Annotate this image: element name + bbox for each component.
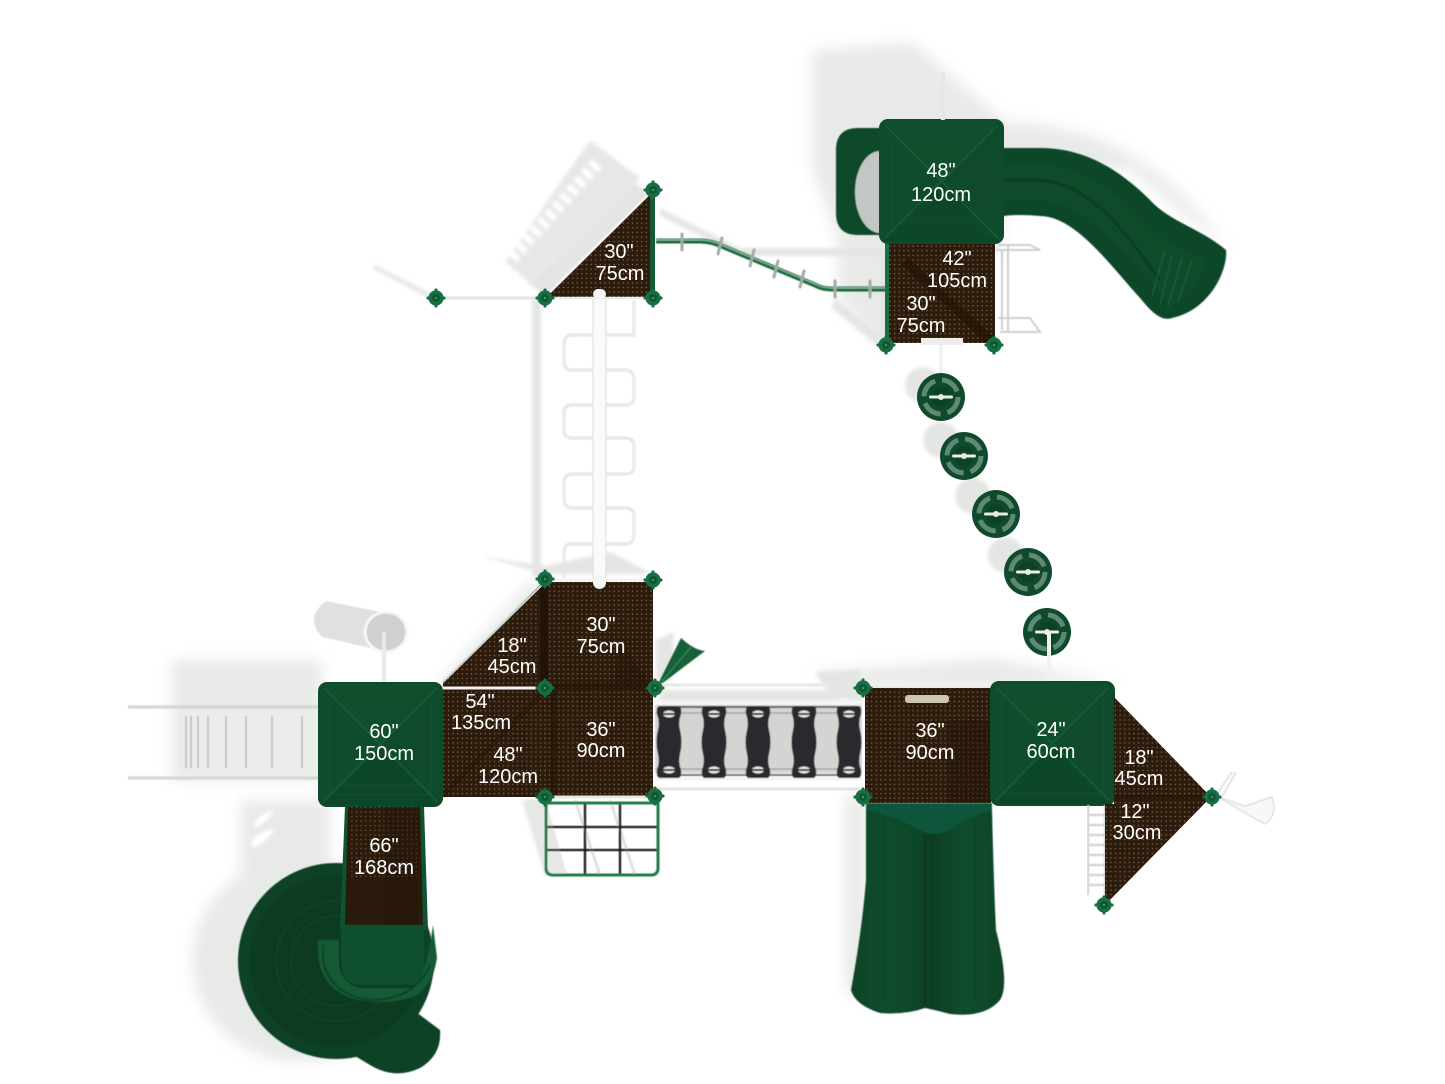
monkey-bar ladder with white centre pole: [564, 289, 634, 589]
label: upper deck 30 inch: 75cm: [897, 315, 945, 337]
wide double slide: [851, 803, 1004, 1015]
label: 36 inch: 90cm: [906, 742, 954, 764]
crawl tube: [314, 601, 407, 682]
upper right curved slide: [1003, 148, 1226, 319]
label: 54 inch: 135cm: [451, 712, 511, 734]
side ladder upper tower: [996, 245, 1040, 332]
stair shadow on upper deck side: [505, 140, 640, 283]
label: 12 inch: [1113, 801, 1161, 844]
roof: 24 inch tower: [990, 681, 1115, 806]
upper tower back wall and dome: [836, 128, 880, 235]
guide rod to far-left post: [440, 296, 545, 300]
label: 18 inch: 45cm: [488, 656, 536, 678]
label: 36 inch: [577, 719, 625, 762]
green tube bridge: [656, 234, 886, 297]
label: 18 inch: [488, 635, 536, 678]
label: 36 inch: 36": [586, 719, 616, 741]
stepping stones: [917, 345, 1071, 682]
36 inch deck, right: [865, 687, 991, 803]
label: 48 inch: 120cm: [478, 766, 538, 788]
small side ladder: [1088, 805, 1105, 905]
green horn: [656, 638, 705, 688]
label: 48 inch: [478, 744, 538, 788]
label: 18 inch: 18": [1124, 747, 1154, 769]
spiral slide entry chute: [318, 925, 437, 1002]
label: upper deck: 75cm: [596, 263, 644, 285]
roof: 24 inch tower: 24": [1036, 719, 1066, 741]
roof: 60 inch tower: 150cm: [354, 743, 414, 765]
label: 30 inch: 75cm: [577, 636, 625, 658]
upper triangular deck: [545, 190, 655, 299]
label: upper deck: [596, 241, 644, 285]
label: upper deck: 30": [604, 241, 634, 263]
label: upper deck 42 inch: [927, 248, 987, 292]
label: upper deck 42 inch: 105cm: [927, 270, 987, 292]
label: 36 inch: [906, 720, 954, 764]
roof: 48 inch tower: 48": [926, 160, 956, 182]
right triangular deck: [1105, 697, 1211, 905]
label: upper deck 42 inch: 42": [942, 248, 972, 270]
main deck cluster: [443, 575, 653, 797]
label: 18 inch: 45cm: [1115, 768, 1163, 790]
label: 66 inch: 168cm: [354, 857, 414, 879]
lower-left deck under 60 inch roof: [340, 806, 428, 930]
ground shadows: [172, 42, 1225, 1062]
label: upper deck 30 inch: [897, 293, 945, 337]
label: 36 inch: 90cm: [577, 740, 625, 762]
structural shadows: [252, 180, 1024, 875]
roof: 48 inch tower: [879, 119, 1004, 244]
bridge planks: [656, 706, 862, 778]
spiral slide bowl: [238, 863, 440, 1073]
cargo net climber: [527, 800, 658, 875]
label: 54 inch: [451, 691, 511, 734]
label: 12 inch: 30cm: [1113, 822, 1161, 844]
roof: 60 inch tower: 60": [369, 721, 399, 743]
label: 66 inch: [354, 835, 414, 879]
label: 18 inch: [1115, 747, 1163, 790]
label: 18 inch: 18": [497, 635, 527, 657]
frame posts: [426, 180, 1222, 914]
label: 48 inch: 48": [493, 744, 523, 766]
left ladder: [128, 707, 320, 778]
plank bridge: [655, 685, 862, 789]
label: 36 inch: 36": [915, 720, 945, 742]
pole above upper tower: [941, 72, 945, 120]
upper rectangular deck: [885, 243, 995, 345]
roof: 48 inch tower: 120cm: [911, 184, 971, 206]
label: 12 inch: 12": [1120, 801, 1150, 823]
label: 30 inch: 30": [586, 614, 616, 636]
label: upper deck 30 inch: 30": [906, 293, 936, 315]
label: 66 inch: 66": [369, 835, 399, 857]
roof: 24 inch tower: 60cm: [1027, 741, 1075, 763]
roof: 60 inch tower: [318, 682, 443, 807]
label: 30 inch: [577, 614, 625, 658]
white horn: [1215, 772, 1274, 824]
label: 54 inch: 54": [465, 691, 495, 713]
